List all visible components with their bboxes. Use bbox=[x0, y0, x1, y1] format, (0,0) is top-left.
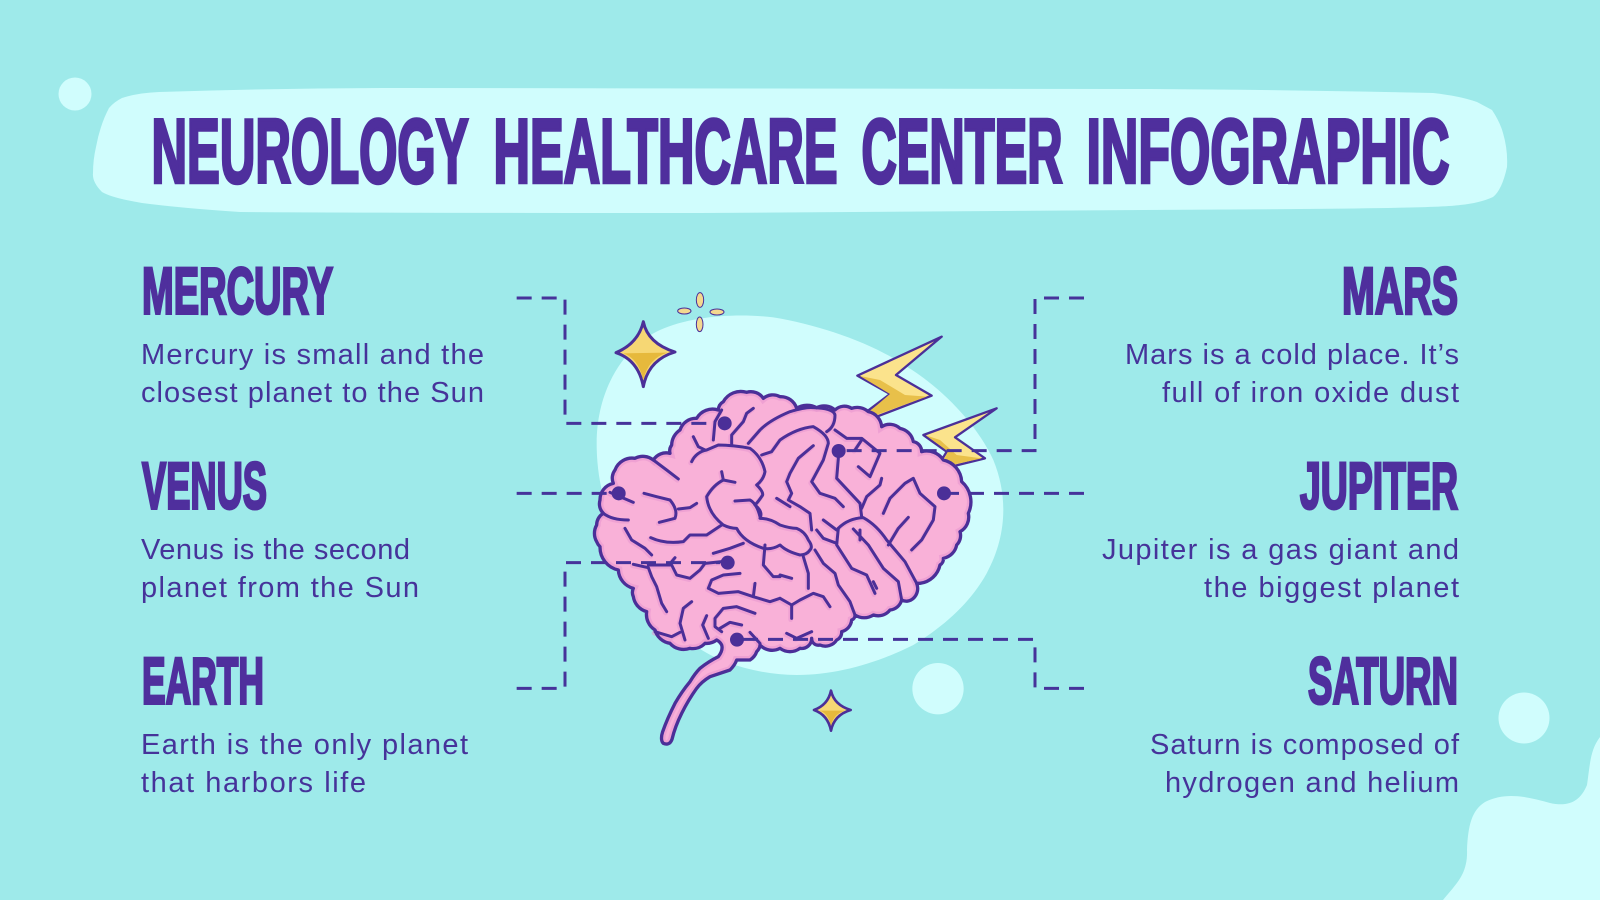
brain rim shade bbox=[594, 391, 971, 744]
decorative blob bottom right bbox=[1443, 737, 1600, 900]
text: mars: full of iron oxide dust bbox=[1162, 377, 1459, 409]
text: venus: Venus is the second bbox=[141, 534, 410, 566]
heading: saturn: SATURN bbox=[1308, 644, 1458, 718]
icon: large star bbox=[616, 322, 675, 387]
background blob bbox=[597, 315, 1003, 675]
panel: earth bbox=[141, 644, 468, 799]
text: mars bbox=[1125, 339, 1459, 409]
text: mercury: closest planet to the Sun bbox=[141, 377, 484, 409]
title: NEUROLOGY bbox=[152, 102, 468, 202]
lightning bolt large bbox=[857, 337, 942, 417]
decorative circle top left bbox=[58, 78, 92, 110]
text: jupiter: the biggest planet bbox=[1204, 572, 1459, 604]
panel: venus bbox=[141, 448, 419, 604]
text: earth: Earth is the only planet bbox=[141, 729, 468, 761]
heading: mercury: MERCURY bbox=[142, 254, 333, 328]
panel: mars bbox=[1125, 254, 1459, 409]
title word 2: HEALTHCARE bbox=[494, 102, 838, 202]
brain folds bbox=[603, 407, 935, 643]
text: saturn: Saturn is composed of bbox=[1150, 729, 1460, 761]
icon: small star bbox=[814, 691, 851, 731]
text: mercury bbox=[141, 339, 484, 409]
icon: sparkle bbox=[678, 293, 724, 332]
text: mars: Mars is a cold place. It’s bbox=[1125, 339, 1459, 371]
text: mercury: Mercury is small and the bbox=[141, 339, 484, 371]
heading: mars: MARS bbox=[1342, 254, 1458, 328]
panel: saturn bbox=[1150, 644, 1460, 799]
heading: jupiter: JUPITER bbox=[1300, 448, 1458, 522]
text: saturn: hydrogen and helium bbox=[1165, 767, 1459, 799]
title word 3: CENTER bbox=[862, 102, 1062, 202]
text: jupiter bbox=[1102, 534, 1459, 604]
heading: venus: VENUS bbox=[142, 448, 267, 522]
panel: mercury bbox=[141, 254, 484, 409]
title banner bbox=[93, 88, 1507, 213]
panel: jupiter bbox=[1102, 448, 1459, 604]
lightning bolt small bbox=[923, 408, 997, 467]
text: saturn bbox=[1150, 729, 1460, 799]
brain fold shade bbox=[602, 409, 934, 645]
brain bbox=[594, 391, 971, 744]
small circle bbox=[912, 663, 964, 714]
heading: earth: EARTH bbox=[142, 644, 264, 718]
decorative circle bottom right bbox=[1498, 692, 1550, 744]
brain outline bbox=[594, 391, 971, 744]
text: earth: that harbors life bbox=[141, 767, 366, 799]
text: jupiter: Jupiter is a gas giant and bbox=[1102, 534, 1459, 566]
connector lines bbox=[517, 298, 1084, 688]
text: venus: planet from the Sun bbox=[141, 572, 419, 604]
text: earth bbox=[141, 729, 468, 799]
brain fill bbox=[594, 391, 971, 744]
text: venus bbox=[141, 534, 419, 604]
brain illustration bbox=[517, 293, 1084, 744]
connector dots bbox=[612, 416, 951, 647]
